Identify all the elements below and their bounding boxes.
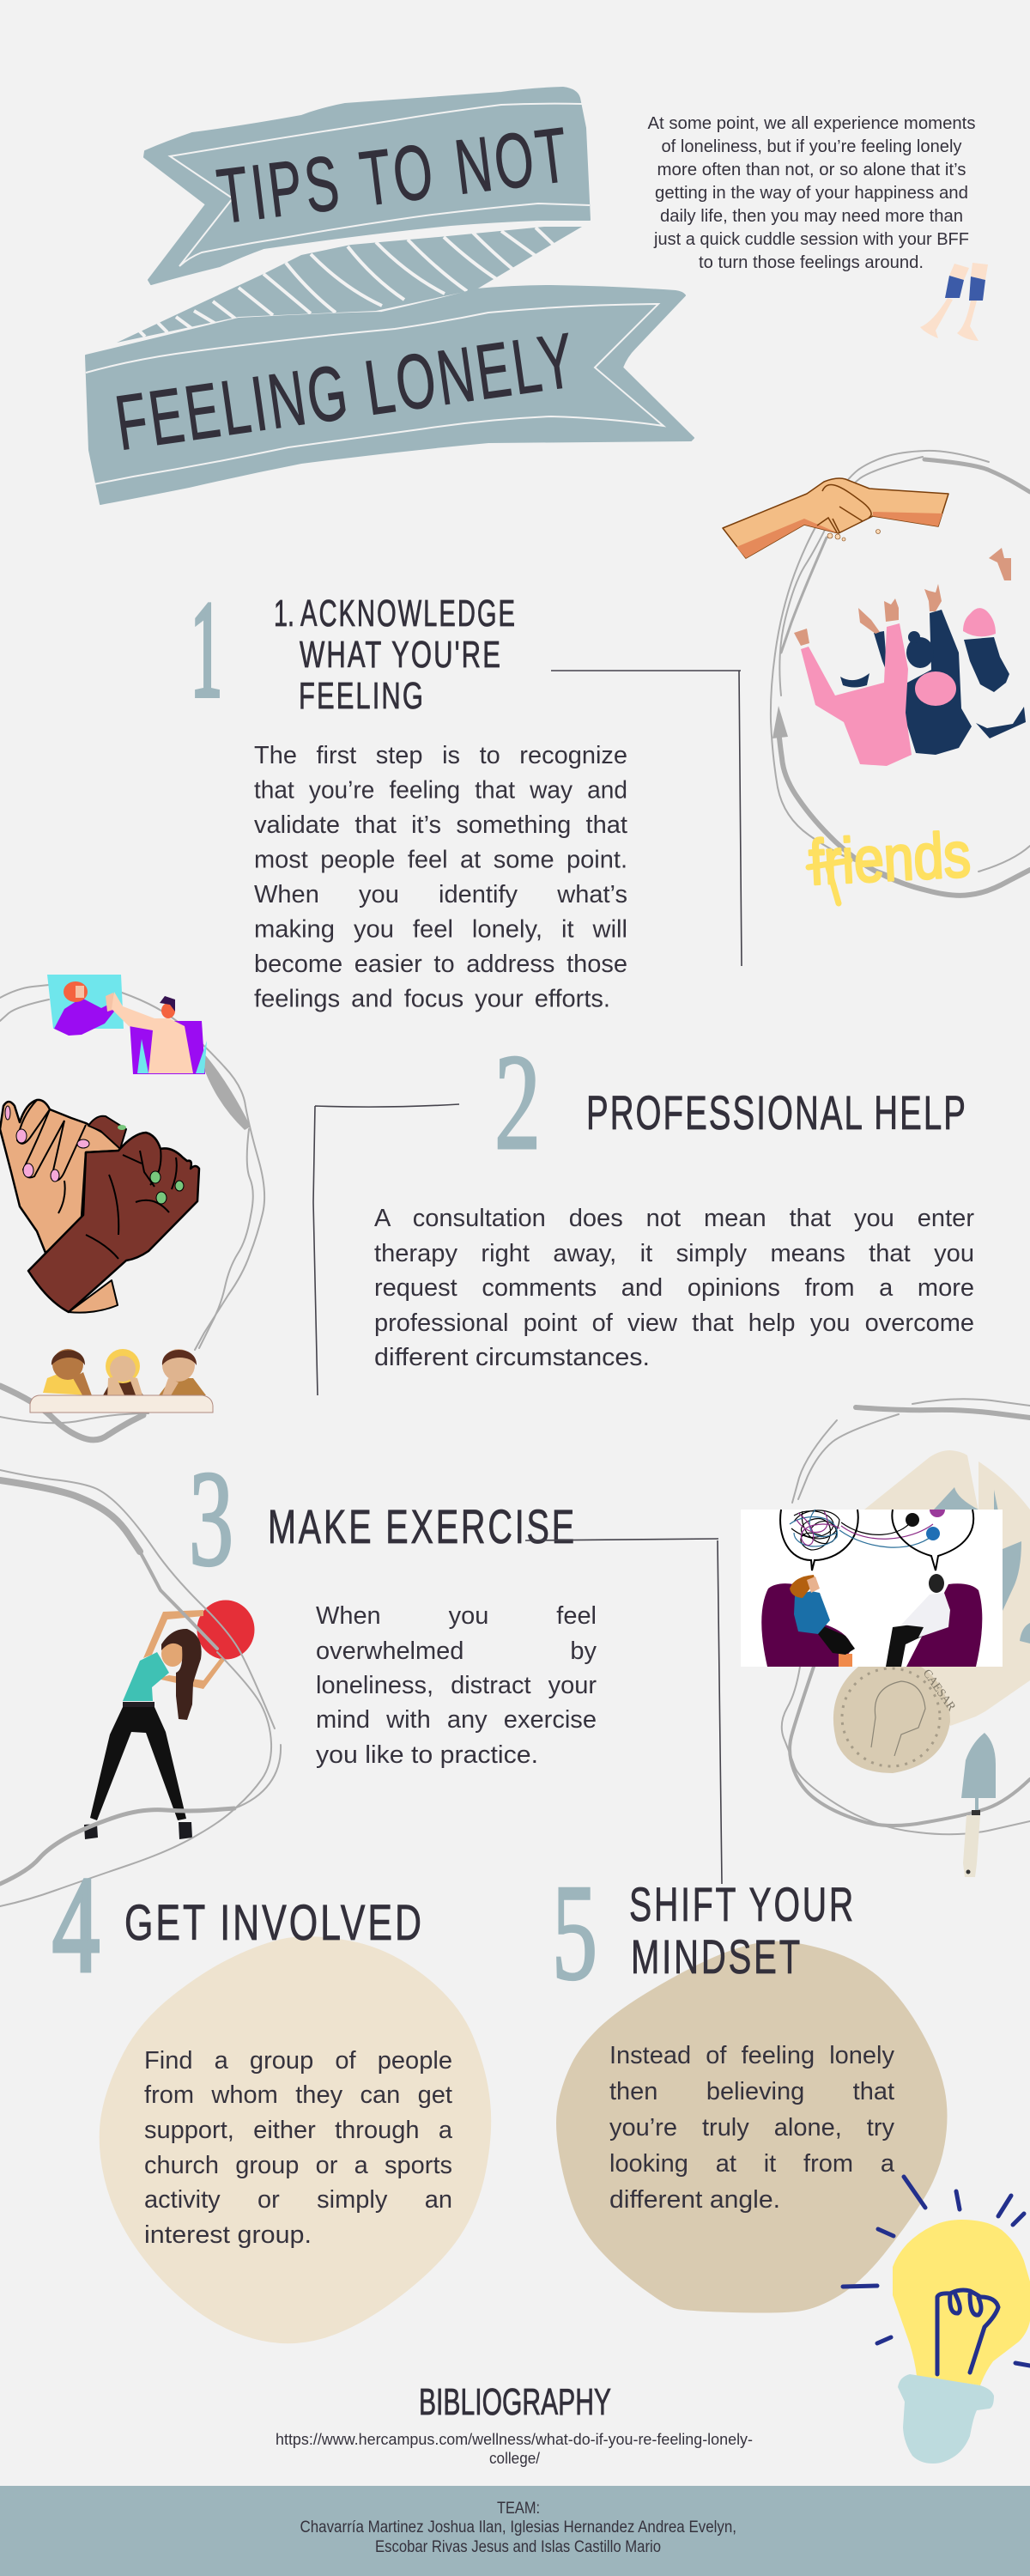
icon: handshake (723, 478, 948, 558)
person right (112, 992, 207, 1073)
intro text: getting in the way of your happiness and (655, 184, 968, 203)
heading text: FEELING (299, 675, 425, 717)
title line 1: TIPS TO NOT (213, 112, 575, 240)
section 3 body text: you like to practice. (316, 1741, 538, 1769)
filament (937, 2290, 998, 2374)
section 4 body text: church group or a sports (144, 2152, 452, 2179)
section 3 body text: overwhelmed by (316, 1637, 597, 1665)
intro text: just a quick cuddle session with your BFF (653, 230, 969, 249)
heading text (274, 592, 517, 717)
bibliography link: https://www.hercampus.com/wellness/what-do-if-you-re-feeling-lonely- (276, 2431, 753, 2448)
section 2 heading (494, 1025, 967, 1178)
section 2 body text: request comments and opinions from a more (374, 1274, 974, 1302)
swirl: section 3 left (0, 1470, 281, 1906)
belt (123, 1702, 154, 1707)
illustration: coin (833, 1667, 958, 1773)
section 1 body text: validate that it’s something that (254, 811, 627, 839)
team credits: Chavarría Martinez Joshua Ilan, Iglesias Hernandez Andrea Evelyn, (300, 2518, 736, 2537)
friends lettering: friends (807, 818, 972, 898)
heading text: 1. (274, 592, 294, 635)
bibliography heading: BIBLIOGRAPHY (419, 2381, 611, 2423)
head (161, 1641, 184, 1667)
swirl: section 3 right (782, 1399, 1030, 1834)
legs (90, 1707, 186, 1820)
section 2 body text: different circumstances. (374, 1344, 650, 1371)
ball (197, 1601, 254, 1659)
section 1 connector (551, 671, 742, 966)
left thought bubble (780, 1510, 858, 1571)
section 2 body text: therapy right away, it simply means that you (374, 1240, 974, 1267)
footer band (0, 2486, 1030, 2576)
intro text: more often than not, or so alone that it’s (657, 161, 966, 179)
heading text: MINDSET (631, 1929, 803, 1984)
number 3: 3 (189, 1442, 233, 1595)
intro text (647, 114, 975, 272)
tangled thoughts (790, 1510, 933, 1550)
title line 2: FEELING LONELY (111, 318, 582, 467)
tan hand (0, 1100, 120, 1313)
swirl: section 1 (771, 451, 1030, 896)
arms (143, 1610, 226, 1689)
third friend (963, 548, 1026, 738)
section 5 body text: looking at it from a (609, 2150, 895, 2178)
therapist (886, 1574, 950, 1667)
section 4 body text: from whom they can get (144, 2081, 452, 2109)
section 4 body text: Find a group of people (144, 2047, 452, 2075)
table (30, 1395, 213, 1413)
number 4: 4 (52, 1848, 100, 2001)
brown hand (28, 1116, 199, 1312)
heading text: SHIFT YOUR (629, 1877, 856, 1931)
heading text: WHAT YOU'RE (300, 634, 502, 676)
illustration: coin: CAESAR (920, 1668, 958, 1714)
section 5 body text: Instead of feeling lonely (609, 2042, 894, 2069)
illustration: high five (47, 975, 207, 1074)
window left (47, 975, 124, 1029)
bibliography link (276, 2431, 753, 2467)
bulb glass (893, 2220, 1030, 2385)
section 3 body text: mind with any exercise (316, 1706, 597, 1734)
banner: striped fold (117, 227, 582, 343)
kid left (43, 1349, 93, 1401)
intro text: of loneliness, but if you’re feeling lonely (661, 137, 961, 156)
heading text (629, 1877, 856, 1984)
illustration: three kids at table (30, 1349, 213, 1413)
section 2 body text: A consultation does not mean that you enter (374, 1205, 974, 1232)
intro text: daily life, then you may need more than (660, 207, 963, 226)
section 1 heading: 1 (191, 573, 222, 726)
section 5 body text: different angle. (609, 2186, 780, 2214)
nails (5, 1106, 184, 1204)
section 2 body text (374, 1205, 974, 1371)
icon: champagne glasses (920, 263, 988, 341)
section 2 connector (313, 1104, 459, 1395)
heading text: MAKE EXERCISE (268, 1499, 577, 1553)
intro text: to turn those feelings around. (699, 253, 924, 272)
kid right (159, 1349, 206, 1401)
number 5: 5 (552, 1856, 597, 2008)
section 5 body text: then believing that (609, 2078, 894, 2105)
decorative blob: shift your mindset (558, 1942, 946, 2312)
top (123, 1652, 169, 1701)
section 3 body text (316, 1602, 597, 1769)
section 3 heading (189, 1442, 577, 1595)
heading text: ACKNOWLEDGE (300, 592, 517, 635)
team credits: TEAM: (497, 2500, 540, 2518)
icon: light bulb (843, 2177, 1030, 2464)
pink friend (794, 598, 912, 766)
section 1 heading (191, 573, 517, 726)
illustration: therapy photo (741, 1510, 1003, 1667)
section 3 body text: When you feel (316, 1602, 597, 1630)
bibliography link: college/ (489, 2450, 540, 2467)
bulb base (898, 2374, 994, 2464)
section 4 body text (144, 2047, 453, 2249)
photo background (741, 1510, 1003, 1667)
balls of thread (906, 1510, 945, 1540)
left chair (761, 1583, 852, 1667)
section 4 body text: support, either through a (144, 2117, 453, 2144)
section 1 body text: making you feel lonely, it will (254, 915, 627, 943)
section 3 connector (525, 1539, 722, 1884)
section 1 body text: feelings and focus your efforts. (254, 986, 610, 1013)
person left (54, 981, 116, 1036)
illustration: friends waving (794, 548, 1026, 766)
illustration: woman exercising (84, 1601, 254, 1839)
navy friend (874, 584, 972, 755)
swirl: section 2 (0, 985, 264, 1440)
section 5 body text: you’re truly alone, try (609, 2114, 894, 2142)
section 4 body text: interest group. (144, 2221, 312, 2249)
illustration: linked hands (0, 1100, 199, 1313)
shoes (84, 1822, 192, 1839)
hair (161, 1629, 202, 1720)
section 4 body text: activity or simply an (144, 2186, 452, 2214)
section 5 heading (552, 1856, 856, 2008)
illustration: beige leaf (864, 1450, 1030, 1726)
client (790, 1575, 855, 1667)
intro text: At some point, we all experience moments (647, 114, 975, 133)
number 2: 2 (494, 1025, 541, 1178)
decorative blob: get involved (101, 1938, 489, 2342)
light rays (843, 2177, 1030, 2366)
section 1 body text (254, 742, 627, 1013)
section 4 heading (52, 1848, 424, 2001)
team credits: Escobar Rivas Jesus and Islas Castillo Mario (375, 2538, 661, 2556)
right chair (906, 1583, 982, 1667)
title banner (86, 88, 694, 504)
section 3 body text: loneliness, distract your (316, 1672, 597, 1699)
section 2 body text: professional point of view that help you overcome (374, 1309, 974, 1337)
section 1 body text: The first step is to recognize (254, 742, 627, 769)
window right (130, 1021, 205, 1074)
section 1 body text: most people feel at some point. (254, 847, 627, 874)
section 1 body text: become easier to address those (254, 951, 627, 978)
right thought bubble (892, 1510, 973, 1571)
section 5 body text (609, 2042, 895, 2214)
kid middle (103, 1349, 143, 1400)
banner: top ribbon (144, 88, 590, 284)
section 1 body text: When you identify what’s (254, 881, 627, 908)
team credits (300, 2500, 736, 2556)
heading text: GET INVOLVED (124, 1895, 424, 1951)
illustration: trowel (961, 1733, 996, 1877)
section 1 body text: that you’re feeling that way and (254, 776, 627, 804)
banner: lower ribbon (86, 286, 694, 504)
